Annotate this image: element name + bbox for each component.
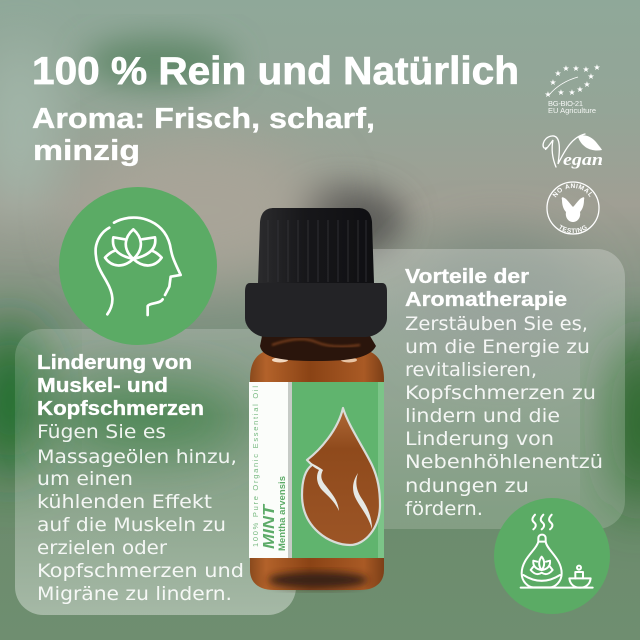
text block: aromatherapy benefits: Zerstäuben Sie es, bbox=[405, 313, 588, 335]
text block: muscle and headache relief: kühlenden Effekt bbox=[37, 491, 212, 513]
label: product text: Mentha arvensis bbox=[277, 476, 288, 551]
text block: muscle and headache relief: auf die Muskeln zu bbox=[37, 514, 226, 536]
label: product text: 100% Pure Organic Essential Oil bbox=[251, 386, 260, 547]
badge: EU organic: EU Agriculture bbox=[548, 106, 596, 115]
icon: head with lotus bbox=[59, 187, 217, 345]
icon: aroma diffuser bbox=[494, 498, 610, 614]
badge: EU organic: ★ bbox=[583, 80, 591, 89]
text block: muscle and headache relief bbox=[37, 352, 244, 605]
badge: no animal testing: TESTING bbox=[560, 224, 587, 233]
bottle glass bbox=[250, 349, 384, 590]
text block: aromatherapy benefits: Vorteile der bbox=[405, 266, 529, 288]
text block: aromatherapy benefits: Nebenhöhlenentzü bbox=[405, 451, 603, 473]
badge: no animal testing: NO ANIMAL bbox=[552, 184, 592, 198]
text block: muscle and headache relief: Fügen Sie es bbox=[37, 421, 166, 443]
text block: muscle and headache relief: Massageölen hinzu, bbox=[37, 446, 237, 468]
badge: EU organic bbox=[544, 63, 601, 115]
cap collar bbox=[245, 283, 387, 337]
subtitle: aroma bbox=[32, 103, 375, 167]
text block: aromatherapy benefits: revitalisieren, bbox=[405, 359, 537, 381]
badge: vegan: egan bbox=[563, 150, 603, 169]
badge: EU organic: ★ bbox=[587, 72, 595, 81]
title: 100 % Rein und Natürlich bbox=[32, 50, 519, 93]
text block: muscle and headache relief: Linderung von bbox=[37, 352, 192, 374]
badge: EU organic: ★ bbox=[593, 63, 601, 72]
text block: muscle and headache relief: erzielen oder bbox=[37, 537, 167, 559]
cap bbox=[258, 208, 374, 283]
badge: EU organic: ★ bbox=[554, 69, 562, 78]
label: product text bbox=[251, 386, 288, 551]
panel: aromatherapy benefits bbox=[340, 249, 625, 529]
badge: EU organic: ★ bbox=[572, 64, 580, 73]
text block: aromatherapy benefits: um die Energie zu bbox=[405, 336, 590, 358]
text block: muscle and headache relief: Muskel- und bbox=[37, 375, 168, 397]
text block: muscle and headache relief: Kopfschmerzen bbox=[37, 398, 204, 420]
panel: muscle and headache relief bbox=[15, 329, 296, 615]
bottle bbox=[245, 208, 387, 590]
badge: no animal testing bbox=[546, 181, 600, 235]
text block: muscle and headache relief: Kopfschmerzen und bbox=[37, 560, 244, 582]
text block: aromatherapy benefits: Aromatherapie bbox=[405, 289, 567, 311]
text block: aromatherapy benefits: lindern und die bbox=[405, 405, 560, 427]
text block: muscle and headache relief: um einen bbox=[37, 468, 133, 490]
text block: aromatherapy benefits: ndungen zu bbox=[405, 475, 529, 497]
badge: EU organic: ★ bbox=[549, 78, 557, 87]
text block: aromatherapy benefits: Linderung von bbox=[405, 428, 554, 450]
label bbox=[249, 382, 384, 558]
badge: EU organic: ★ bbox=[562, 64, 570, 73]
label: product text: MINT bbox=[261, 504, 278, 549]
text block: aromatherapy benefits bbox=[405, 266, 603, 520]
badge: EU organic: BG-BIO-21 bbox=[548, 99, 583, 108]
text block: aromatherapy benefits: Kopfschmerzen zu bbox=[405, 382, 596, 404]
bottle neck bbox=[260, 336, 376, 361]
badge: EU organic: ★ bbox=[568, 88, 576, 97]
badge: EU organic: ★ bbox=[544, 90, 552, 99]
label: oil drop bbox=[302, 408, 380, 545]
badge: EU organic: ★ bbox=[557, 88, 565, 97]
badge: EU organic: ★ bbox=[582, 65, 590, 74]
badge: EU organic: ★ bbox=[576, 85, 584, 94]
text block: aromatherapy benefits: fördern. bbox=[405, 498, 483, 520]
text block: muscle and headache relief: Migräne zu lindern. bbox=[37, 583, 232, 605]
badge: vegan bbox=[543, 134, 603, 169]
subtitle: aroma: minzig bbox=[33, 135, 140, 167]
subtitle: aroma: Aroma: Frisch, scharf, bbox=[32, 103, 375, 135]
